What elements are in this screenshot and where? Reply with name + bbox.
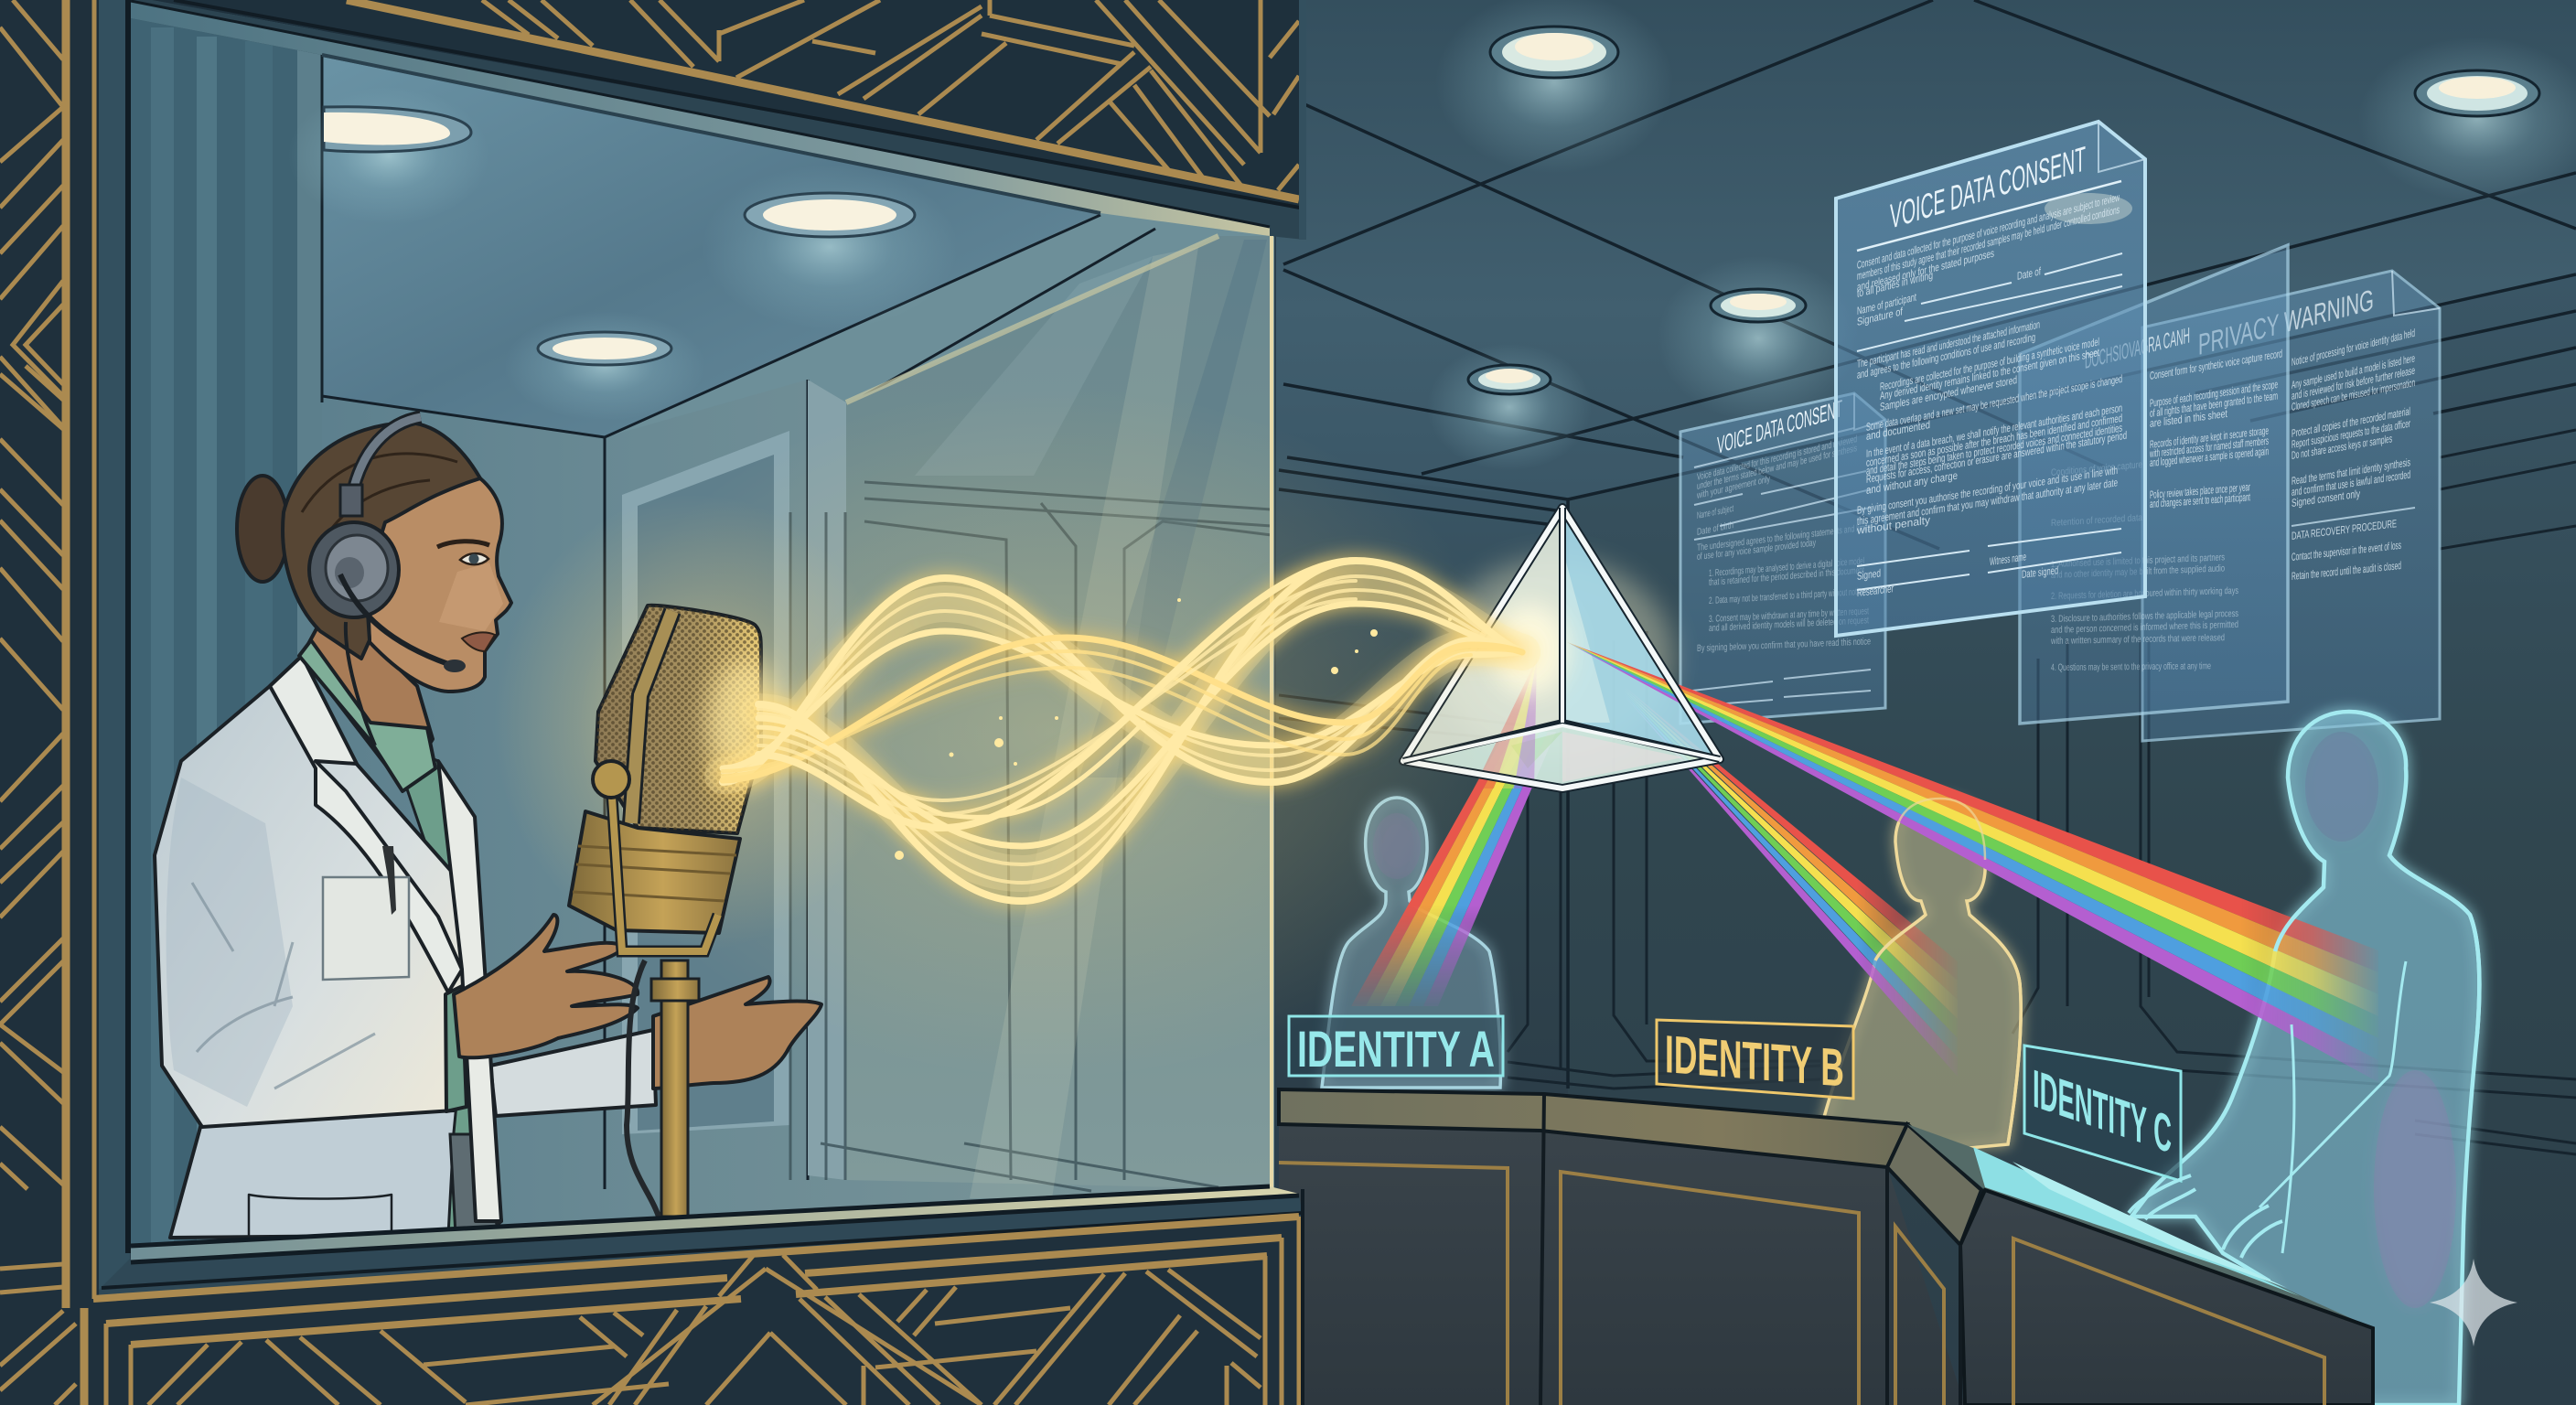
light sill (131, 1186, 1299, 1260)
mic stand pole (661, 960, 688, 1217)
top panel gold lines (482, 0, 1299, 190)
holographic document: privacy warning: DATA RECOVERY PROCEDURE (2292, 517, 2397, 542)
glowing console surface (1907, 1124, 2373, 1328)
ceiling lights: booth (288, 87, 958, 421)
main document body text: In the event of a data breach, we shall notify the relevant authorities and each person (1866, 402, 2122, 460)
holographic document: middle sheet: are listed in this sheet (2150, 407, 2227, 430)
privacy warning title: PRIVACY WARNING (2198, 284, 2374, 361)
figure: identity C (2131, 712, 2479, 1405)
holographic document: voice data consent small: and all derived identity models will be deleted on request (1709, 615, 1869, 634)
holographic document: voice data consent small: The undersigned agrees to the following statements and limits (1697, 521, 1871, 553)
prism glow (1436, 558, 1674, 759)
neck (302, 622, 433, 787)
holographic document: privacy warning: Any sample used to build a model is listed here (2292, 351, 2415, 391)
booth light 1 (288, 87, 489, 224)
main document body text: without penalty (1856, 513, 1930, 537)
main document body text: Requests for access, correction or erasure are answered within the statutory period (1866, 429, 2127, 486)
main document body text: Date of (2017, 264, 2041, 283)
main document body text: By giving consent you authorise the recording of your voice and its use in line with (1857, 464, 2118, 517)
light 4 (1427, 343, 1592, 471)
holographic document: voice data consent small (1680, 393, 1885, 724)
holographic document: middle sheet: with restricted access for named staff members (2149, 434, 2269, 460)
holographic document: privacy warning: Report suspicious requests to the data officer (2292, 417, 2410, 451)
main document body text: Signature of (1857, 305, 1903, 328)
mic boom (340, 574, 459, 668)
holographic document: voice data consent small: under the terms stated below and may be used for synthesis (1697, 443, 1857, 492)
counter front left (1279, 1124, 1965, 1405)
main document body text (1856, 191, 2127, 599)
light 3 (1658, 256, 1859, 421)
holographic document: middle sheet: Policy review takes place once per year (2150, 480, 2250, 501)
main document body text: this agreement and confirm that you may withdraw that authority at any later date (1857, 476, 2118, 528)
vintage microphone (569, 606, 784, 1217)
warm glow around microphone (494, 494, 896, 951)
holographic document: middle sheet: Retention of recorded data (2051, 512, 2142, 529)
main document body text: to all parties in writing (1857, 269, 1933, 300)
right face (1562, 508, 1720, 759)
holographic document: privacy warning: Cloned speech can be misused for impersonation (2292, 376, 2415, 413)
ear cup (309, 522, 399, 617)
holographic document: middle sheet: with a written summary of the records that were released (2050, 632, 2225, 647)
headband (351, 417, 421, 499)
left pillar (131, 14, 322, 1244)
main document body text: and released only for the stated purposes (1857, 247, 1994, 294)
holographic document: middle sheet: and the person concerned is informed where this is permitted (2051, 619, 2238, 636)
lapel (270, 656, 462, 992)
main document body text: Date signed (2022, 563, 2058, 581)
pocket (323, 877, 409, 980)
holographic document: middle sheet (2020, 245, 2288, 724)
base face (1403, 723, 1720, 788)
main document body text: The participant has read and understood the attached information (1857, 318, 2040, 370)
floating sparks (895, 598, 1452, 860)
mic yoke (611, 783, 718, 951)
hot spot (1491, 604, 1568, 695)
ceiling (1276, 0, 2576, 512)
label: identity A: IDENTITY A (1297, 1020, 1495, 1078)
booth light 3 (504, 311, 705, 421)
cuff and near hand (445, 986, 467, 1111)
mic glow (707, 659, 784, 787)
holographic document: middle sheet: 2. Requests for deletion are honoured within thirty working days (2051, 585, 2238, 602)
top slate frame band (131, 0, 1304, 240)
watermark star (2430, 1259, 2517, 1346)
lower coat (170, 1006, 501, 1238)
hair bun (237, 476, 288, 582)
prism (1403, 508, 2378, 1082)
coat body (155, 656, 467, 1127)
wave strand group 1 (723, 578, 1522, 782)
main document body text: concerned as soon as possible after the breach has been identified and confirmed (1866, 412, 2122, 469)
identity figure outlines over beams (1322, 799, 2479, 1253)
top art deco panel (152, 0, 1304, 209)
coat right panel (438, 761, 501, 1221)
glass inner trim (846, 236, 1218, 402)
reflection streaks (970, 247, 1198, 1198)
back wall (131, 210, 1274, 1253)
holographic document: privacy warning: Read the terms that limit identity synthesis (2292, 456, 2410, 488)
holographic document: voice data consent small: of use for any voice sample provided today (1697, 537, 1816, 563)
wall right of corner (1568, 274, 2576, 1405)
main document body text: Consent and data collected for the purpose of voice recording and analysis are subject to review (1857, 191, 2120, 272)
recess window in back wall (622, 431, 789, 1134)
figure: identity A (1322, 798, 1500, 1088)
booth ceiling (322, 57, 1100, 437)
face (366, 478, 511, 692)
rainbow beam to identity B (1624, 686, 1958, 1077)
booth interior (131, 14, 1528, 1253)
mouth (462, 632, 495, 651)
holographic document: privacy warning: and is reviewed for risk before further release (2292, 364, 2415, 402)
holographic document: voice data consent small: Voice data collected for this recording is stored and reviewed (1697, 434, 1857, 483)
light 1 (1435, 0, 1673, 174)
holographic document: middle sheet: 1. Authorised use is limited to this project and its partners (2051, 552, 2225, 570)
gold trim panels (1279, 1163, 2324, 1405)
glass vertical edge (1270, 236, 1273, 1189)
lower coat pocket (249, 1195, 392, 1239)
main document body text: Signed (1857, 566, 1881, 583)
main document body text: Witness name (1990, 550, 2026, 568)
golden sound waves (723, 561, 1522, 901)
hair (283, 423, 480, 659)
holographic document: voice data consent small: 1. Recordings may be analysed to derive a digital voice model (1709, 555, 1864, 579)
main document body text: members of this study agree that their recorded samples may be held under controlled conditions (1857, 203, 2120, 283)
wave strand group 4 (758, 561, 1356, 828)
cable (627, 960, 659, 1217)
woman in lab coat (155, 417, 821, 1239)
right edge of booth below glass (1301, 1189, 1304, 1405)
holographic document: privacy warning: Retain the record until the audit is closed (2292, 559, 2401, 583)
holographic document: privacy warning: Signed consent only (2292, 488, 2360, 509)
holographic document: privacy warning (2142, 271, 2440, 741)
left face (1403, 508, 1562, 761)
main document body text: and agrees to the following conditions of use and recording (1857, 330, 2035, 381)
mic head (596, 606, 761, 833)
main document body text: Samples are encrypted whenever stored (1880, 373, 2017, 413)
cheek light (439, 563, 503, 631)
main document body text: Any derived identity remains linked to the consent given on this sheet (1880, 346, 2099, 402)
gold frame verticals (106, 1217, 1299, 1405)
hands of identity C (2129, 1175, 2282, 1258)
holographic document: middle sheet: DOCHSIOVAGRA CANH (2085, 324, 2190, 374)
ceiling grid (1279, 0, 2576, 1089)
counter front right (1960, 1190, 2373, 1405)
main document body text: and without any charge (1866, 469, 1958, 497)
holographic document: middle sheet: and changes are sent to each participant (2150, 490, 2250, 510)
ceiling lights: prism room (1427, 0, 2576, 471)
holographic document: middle sheet: Records of identity are kept in secure storage (2150, 424, 2269, 451)
wave strand group 2 (758, 561, 1522, 901)
label: identity C (2024, 1046, 2181, 1181)
holographic document: voice data consent small: with your agreement only (1696, 474, 1770, 501)
bottom window sill and art deco panel (93, 1186, 1303, 1405)
label: identity B (1657, 1020, 1853, 1099)
rainbow beam to identity C (1567, 642, 2378, 1082)
gold bands (93, 1217, 1299, 1345)
holographic document: voice data consent small: VOICE DATA CONSENT (1717, 394, 1842, 459)
warm glow around waves (576, 384, 1528, 1079)
holographic document: privacy warning: and confirm that use is lawful and recorded (2292, 468, 2410, 499)
holographic document: middle sheet: Purpose of each recording session and the scope (2150, 378, 2278, 410)
main document body text: Researcher (1857, 582, 1894, 599)
figure: identity B (1816, 799, 2021, 1153)
holographic document: middle sheet: and no other identity may be built from the supplied audio (2051, 563, 2225, 581)
main document title: VOICE DATA CONSENT (1890, 140, 2086, 237)
bottom dark panel (93, 1217, 1303, 1405)
light 2 (2358, 37, 2576, 201)
main document body text: and documented (1866, 418, 1930, 443)
holographic document: voice data consent small: 3. Consent may be withdrawn at any time by written request (1709, 606, 1869, 625)
holographic document: privacy warning: Protect all copies of the recorded material (2292, 404, 2410, 440)
holographic document: middle sheet: Conditions of voice capture (2051, 459, 2142, 478)
holographic document: privacy warning: Contact the supervisor in the event of loss (2292, 539, 2401, 563)
window frame left and top (99, 0, 1306, 1290)
counter top surface (1279, 1089, 1907, 1167)
collar (299, 640, 435, 791)
glass panel region (846, 236, 1272, 1189)
right room background (1276, 0, 2576, 1405)
frame end cap (1299, 0, 1306, 240)
brow (437, 542, 489, 547)
top gold band (347, 0, 1299, 199)
shirt and inner trousers (391, 741, 499, 1235)
holographic document: middle sheet: 4. Questions may be sent to the privacy office at any time (2051, 660, 2211, 673)
holographic document: voice data consent small: Name of subject (1697, 503, 1733, 521)
label: identity A (1289, 1016, 1503, 1078)
ceiling light seen through sheet (2045, 193, 2132, 224)
counter (1279, 1089, 2373, 1405)
main document body text: and detail the steps being taken to protect recorded voices and connected identities (1866, 421, 2122, 477)
holographic document: voice data consent small: that is retained for the period described in this document (1709, 564, 1864, 588)
rainbow beam to identity A (1351, 732, 1556, 1006)
far hand (653, 977, 821, 1089)
far sleeve (490, 1030, 656, 1116)
ceiling edge band (605, 213, 1272, 437)
main document body text: Recordings are collected for the purpose of building a synthetic voice model (1880, 335, 2099, 393)
headset cable (346, 622, 375, 745)
pen (382, 846, 396, 915)
eye (460, 553, 488, 564)
wave strand group 3 (723, 638, 1522, 780)
door frame strip (808, 380, 846, 1180)
main document body text: Some data overlap and a new set may be requested when the project scope is changed (1866, 372, 2122, 434)
wall mouldings (1279, 430, 2576, 1154)
holographic document: middle sheet: 3. Disclosure to authorities follows the applicable legal process (2051, 608, 2238, 625)
wall left of corner (1276, 470, 1568, 1098)
coat folds (192, 883, 375, 1089)
holographic document: privacy warning: Notice of processing for voice identity data held (2292, 327, 2415, 369)
holographic document: privacy warning: Do not share access keys or samples (2292, 432, 2392, 462)
slate frame band (99, 1194, 1303, 1295)
holographic document: middle sheet: and logged whenever a sample is opened again (2150, 445, 2269, 469)
rainbow refraction downward inside prism (1474, 659, 1537, 788)
top light trim band (131, 2, 1270, 236)
mic head band (631, 611, 672, 823)
booth light 2 (702, 165, 958, 329)
left slate frame (99, 0, 130, 1290)
label: identity B: IDENTITY B (1665, 1024, 1844, 1099)
holographic document: voice data consent main (1836, 122, 2145, 636)
holographic document: voice data consent small: By signing below you confirm that you have read this notice (1697, 636, 1871, 654)
holographic document: voice data consent small: 2. Data may not be transferred to a third party without notice (1709, 586, 1864, 606)
mic base (569, 811, 740, 933)
holographic document: middle sheet: of all rights that have been granted to the team (2150, 389, 2278, 420)
wave ribbon fills (723, 583, 1522, 874)
coat shading (166, 778, 293, 1107)
mic grille dots (596, 606, 761, 833)
holographic document: middle sheet: Consent form for synthetic voice capture record (2150, 347, 2282, 382)
prism edges (1403, 508, 1720, 788)
counter angled segment (1887, 1124, 1981, 1245)
main document body text: Name of participant (1857, 290, 1916, 317)
holographic document: voice data consent small: Date of birth (1697, 520, 1733, 538)
bottom panel gold lines (148, 1255, 1261, 1405)
left wall art deco panel (0, 0, 101, 1405)
signature and field lines (1857, 253, 2122, 590)
label: identity C: IDENTITY C (2033, 1057, 2172, 1164)
